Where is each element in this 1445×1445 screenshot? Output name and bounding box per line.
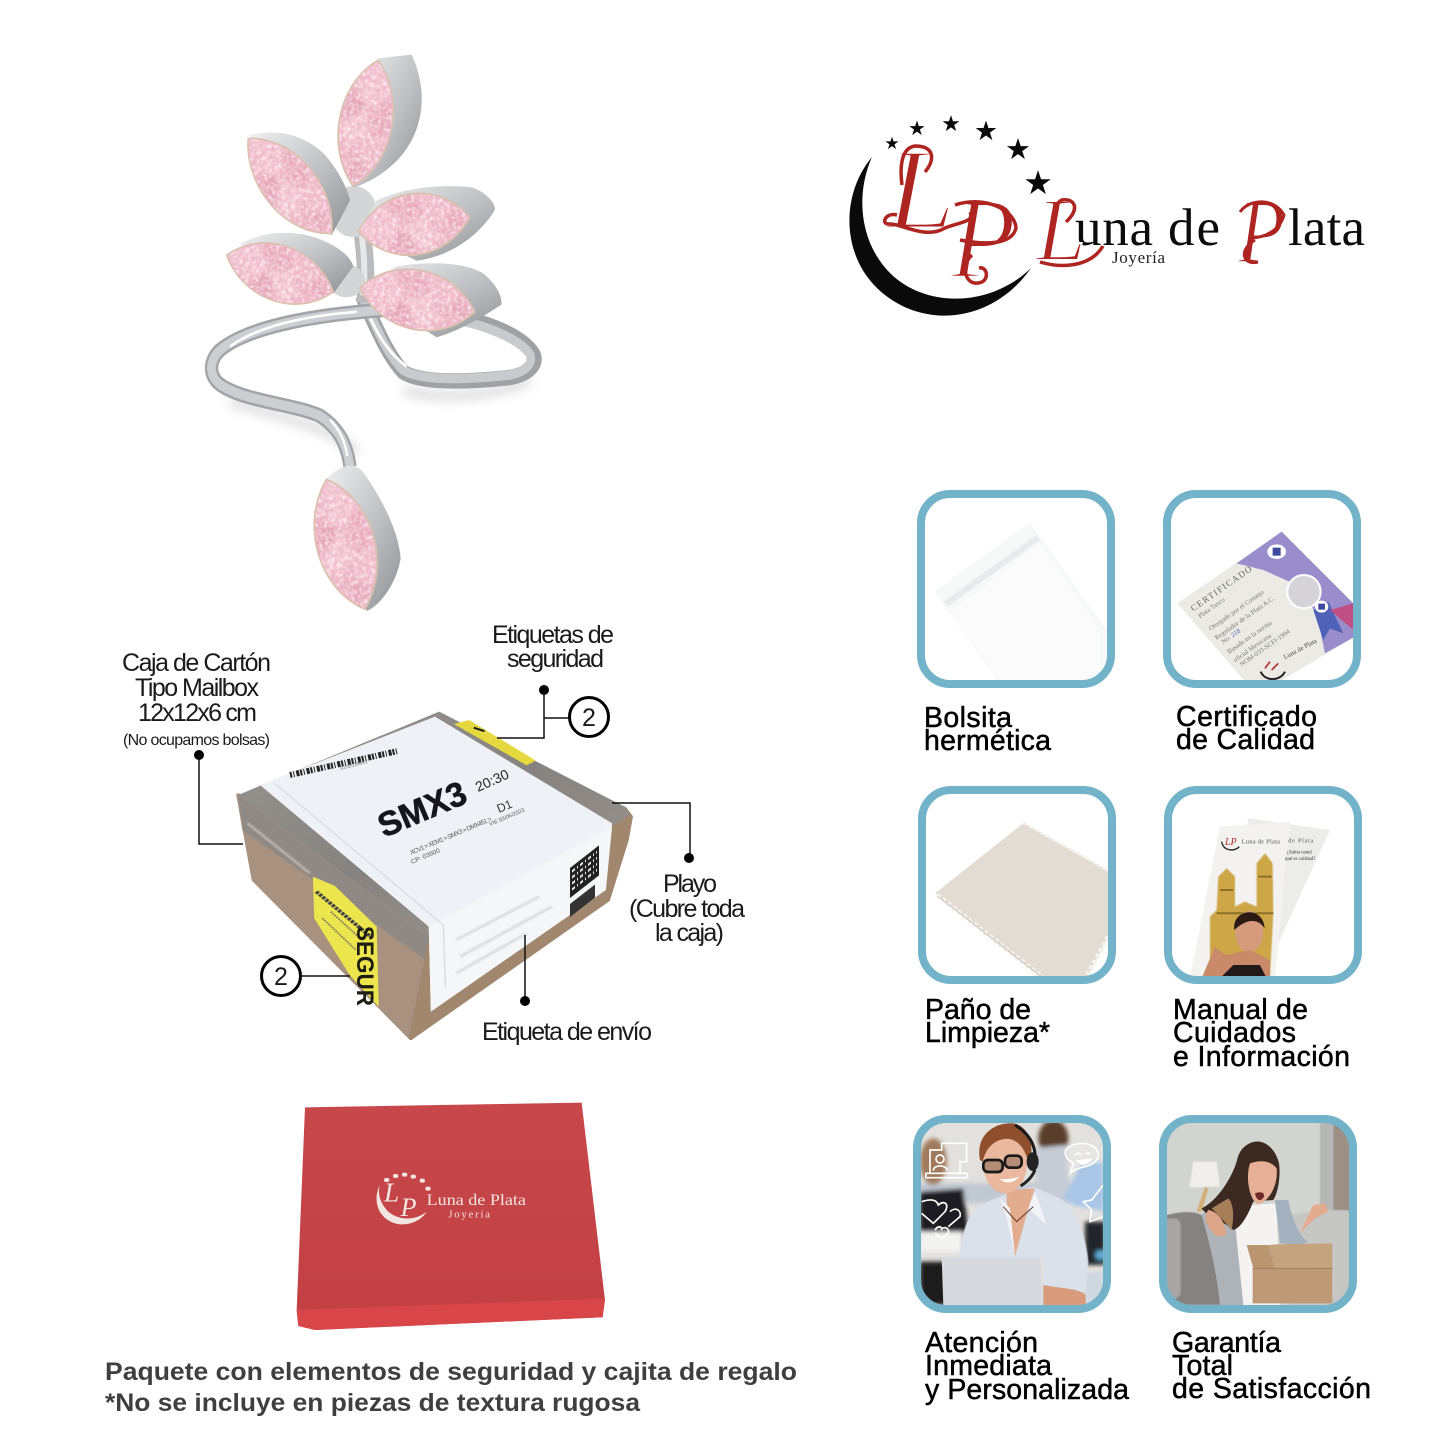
- panel: certificado de calidad: Regulador de la Plata A.C.: [1214, 595, 1276, 642]
- callout: playo: [612, 803, 745, 947]
- panel: garantía total: [1163, 1119, 1371, 1405]
- callout: second security label: [262, 956, 350, 996]
- label: Bolsita: [924, 702, 1012, 734]
- note text: *No se incluye en piezas de textura rugosa: [105, 1389, 641, 1417]
- callout: etiqueta de envío: Etiqueta de envío: [482, 1018, 652, 1046]
- label: Manual de: [1173, 994, 1308, 1026]
- logo: Luna de Plata Joyería: [849, 112, 1365, 316]
- callout: second security label: 2: [274, 963, 288, 991]
- label: [925, 1327, 1129, 1406]
- yellow security seal side: [313, 877, 379, 1007]
- panel: certificado de calidad: Plata Taxco: [1197, 596, 1227, 620]
- gift box foil logo: L: [383, 1178, 399, 1208]
- left cardboard face: [238, 795, 431, 1038]
- panel: bolsita hermética: [921, 494, 1111, 757]
- callout: etiquetas de seguridad: seguridad: [507, 645, 604, 673]
- white shipping label: [260, 717, 612, 1012]
- wordmark: P: [1237, 180, 1285, 282]
- icon: crescent moon: [849, 157, 1031, 316]
- box label printed text: 0330018691: [340, 759, 369, 772]
- callout: caja de cartón: 12x12x6 cm: [138, 699, 257, 727]
- label: Total: [1172, 1350, 1233, 1382]
- note text: Paquete con elementos de seguridad y cajita de regalo: [105, 1358, 797, 1386]
- icon: six stars: ★: [974, 116, 998, 147]
- box label printed text: D1: [495, 797, 515, 816]
- label: hermética: [924, 725, 1051, 757]
- barcode: [290, 751, 398, 775]
- wordmark: L: [1034, 181, 1086, 280]
- panel: manual de cuidados: Luna de Plata: [1242, 838, 1280, 845]
- callout: caja de cartón: (No ocupamos bolsas): [123, 732, 270, 749]
- monogram LP: [884, 126, 1016, 302]
- panel: certificado de calidad: NOM-033-SCFI-1994: [1239, 628, 1292, 668]
- panel: certificado de calidad: Basado en la norma: [1226, 620, 1273, 656]
- box label printed text: [290, 751, 599, 1006]
- box label printed text: 20:30: [473, 766, 511, 795]
- callout: etiquetas de seguridad: Etiquetas de: [492, 621, 614, 649]
- box label printed text: SMX3: [372, 774, 472, 845]
- icon: six stars: ★: [884, 134, 900, 154]
- label: e Información: [1173, 1041, 1350, 1073]
- callout: caja de cartón: Tipo Mailbox: [135, 674, 260, 702]
- panel: certificado de calidad: oficial Mexicana: [1232, 632, 1273, 664]
- callout: playo: (Cubre toda: [629, 895, 745, 923]
- label: Limpieza*: [925, 1017, 1050, 1049]
- icon: six stars: ★: [908, 116, 926, 140]
- top face with plastic: [238, 712, 630, 938]
- panel: certificado de calidad: Luna de Plata: [1283, 638, 1318, 661]
- box label printed text: VIE 03/06/2023: [488, 808, 526, 828]
- gift box foil logo: P: [400, 1193, 417, 1222]
- box label printed text: CP: 03900: [410, 847, 441, 866]
- panel: manual de cuidados: ¿Sabía usted: [1287, 850, 1312, 855]
- callout: etiquetas de seguridad: 2: [582, 704, 596, 732]
- panel: manual de cuidados: [1168, 790, 1358, 1073]
- label: Atención: [925, 1327, 1038, 1359]
- yellow security seal top: [454, 720, 536, 765]
- panel: certificado de calidad: No. 218: [1220, 627, 1243, 646]
- wordmark: lata: [1288, 199, 1365, 257]
- panel: paño de limpieza: [922, 790, 1112, 1049]
- monogram LP: L: [884, 126, 956, 253]
- label: [1176, 701, 1317, 756]
- icon: six stars: ★: [1005, 132, 1031, 166]
- label: Paño de: [925, 994, 1031, 1026]
- label: Inmediata: [925, 1350, 1052, 1382]
- label: y Personalizada: [925, 1374, 1129, 1406]
- callout: caja de cartón: Caja de Cartón: [122, 649, 271, 677]
- callout: etiqueta de envío: [482, 935, 652, 1046]
- icon: six stars: ★: [941, 112, 961, 137]
- label: Garantía: [1172, 1327, 1281, 1359]
- gift box foil logo: Joyería: [448, 1209, 490, 1220]
- shipping box photo: [238, 712, 631, 1038]
- box label printed text: XCV1 > XEM1 > SMX3 > DMX451 >: [409, 816, 493, 857]
- label: de Satisfacción: [1172, 1373, 1371, 1405]
- gift box foil logo: [377, 1175, 526, 1224]
- icon: six stars: [884, 112, 1053, 202]
- QR code: [570, 845, 599, 917]
- icon: six stars: ★: [1023, 163, 1053, 202]
- panel: manual de cuidados: LP: [1224, 837, 1237, 848]
- panel: certificado de calidad: CERTIFICADO: [1189, 563, 1255, 613]
- right cardboard face: [411, 808, 631, 1038]
- wordmark: de: [1168, 199, 1220, 257]
- callout: etiquetas de seguridad: [492, 621, 614, 738]
- product photo: ring with pink marquise gems: [212, 51, 535, 623]
- gift box foil logo: Luna de Plata: [427, 1192, 526, 1209]
- wordmark: [1034, 180, 1365, 282]
- label: [924, 702, 1051, 757]
- panel: atención inmediata: [917, 1119, 1129, 1406]
- red gift box: [297, 1103, 605, 1330]
- tagline: Joyería: [1112, 248, 1165, 267]
- label: [925, 994, 1050, 1049]
- label: Cuidados: [1173, 1017, 1296, 1049]
- box label printed text: SEGUR: [351, 926, 378, 1006]
- label: de Calidad: [1176, 724, 1315, 756]
- callout: playo: Playo: [663, 870, 717, 898]
- callout: caja de cartón: [122, 649, 271, 844]
- note text: [105, 1358, 797, 1417]
- panel: manual de cuidados: de Plata: [1288, 839, 1314, 845]
- label: Certificado: [1176, 701, 1317, 733]
- wordmark: una: [1075, 199, 1153, 257]
- label: [1173, 994, 1350, 1073]
- panel: certificado de calidad: [1167, 494, 1357, 756]
- callout: playo: la caja): [655, 919, 724, 947]
- panel: manual de cuidados: qué es calidad?: [1285, 857, 1316, 862]
- label: [1172, 1327, 1371, 1405]
- panel: certificado de calidad: Otorgado por el Consejo: [1208, 589, 1266, 632]
- monogram LP: P: [949, 175, 1016, 302]
